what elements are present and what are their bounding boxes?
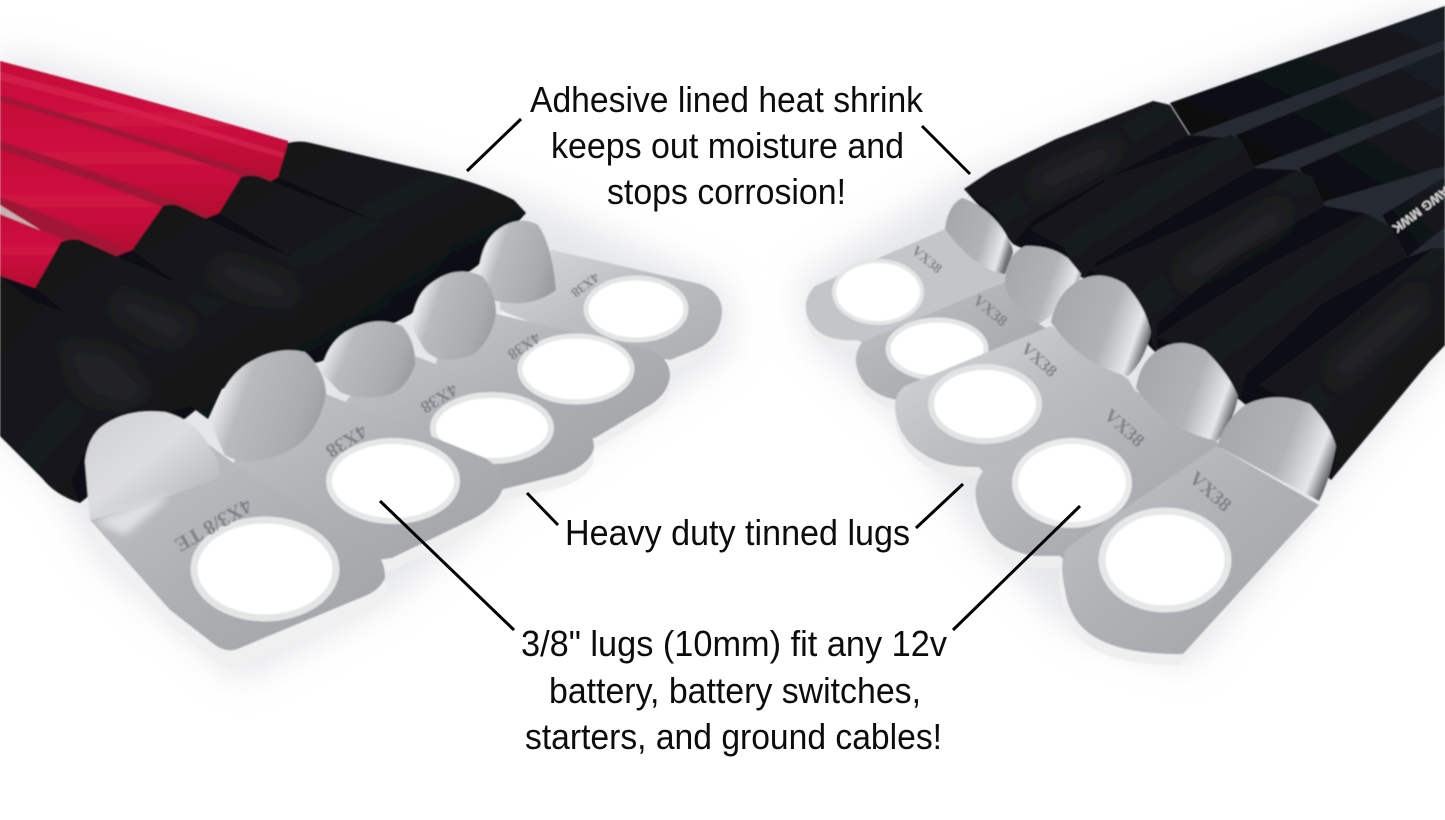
callout text: heavy duty tinned lugs: Heavy duty tinned lugs [565, 512, 910, 553]
lug 3 [895, 275, 1151, 492]
lug 4 [974, 343, 1238, 584]
callout text: lug size [521, 623, 947, 757]
black cables [1170, 6, 1445, 257]
callout text: lug size: starters, and ground cables! [525, 716, 942, 757]
lug 4: VX38 [1100, 405, 1148, 452]
heat shrink backing [964, 101, 1445, 480]
arrow: tinned lugs right [916, 484, 963, 528]
sheen: left heat shrinks [60, 255, 300, 410]
callout text: lug size: battery, battery switches, [549, 670, 921, 711]
callout text: adhesive lined heat shrink: stops corrosion! [607, 171, 846, 212]
lug 3 [321, 321, 594, 502]
heat shrink 3 [1090, 170, 1325, 354]
callout text: adhesive lined heat shrink: Adhesive lined heat shrink [530, 79, 924, 120]
sheen: right heat shrinks [1030, 140, 1430, 385]
lug 1 [806, 198, 1015, 354]
lug 2 [212, 350, 503, 577]
photo: left red cable set [0, 61, 722, 667]
callout text: lug size: 3/8" lugs (10mm) fit any 12v [521, 623, 947, 664]
heat shrink 1 [964, 101, 1189, 244]
lug 5: 4X38 [568, 269, 602, 300]
lug 2 [856, 246, 1081, 414]
heat shrink 1 [278, 142, 526, 263]
heat shrink 4 [1157, 213, 1408, 400]
callout text: adhesive lined heat shrink [530, 79, 924, 212]
lug 4: 4X38 [504, 329, 543, 363]
lug 2: VX38 [969, 292, 1010, 330]
red cables [0, 61, 290, 300]
lug 1 [85, 411, 387, 667]
lug 2: 4X38 [322, 420, 371, 462]
callout text: adhesive lined heat shrink: keeps out moisture and [551, 125, 904, 166]
heat shrink 3 [132, 204, 396, 360]
photo: right black cable set [806, 6, 1445, 665]
lug 5 [1059, 397, 1336, 665]
lug 3: 4X38 [417, 380, 461, 418]
lug 3: VX38 [1017, 339, 1061, 381]
heat shrink 5 [0, 276, 193, 503]
lug 5: VX38 [1185, 467, 1236, 516]
heat shrink 2 [219, 176, 453, 314]
arrow: lug size right [953, 506, 1080, 630]
lug 1: 4X3/8 TE [171, 494, 256, 557]
lug 1: VX38 [908, 244, 944, 277]
arrow: lug size left [380, 501, 514, 630]
arrow: tinned lugs left [527, 493, 558, 525]
heat shrink 5 [1259, 248, 1445, 480]
arrow: heat shrink right [922, 126, 970, 174]
arrow: heat shrink left [467, 119, 521, 171]
lug 5 [479, 221, 722, 371]
heat shrink 4 [35, 239, 311, 419]
heat shrink backing [0, 143, 526, 503]
heat shrink 2 [1030, 135, 1255, 278]
lug 4 [411, 272, 670, 453]
